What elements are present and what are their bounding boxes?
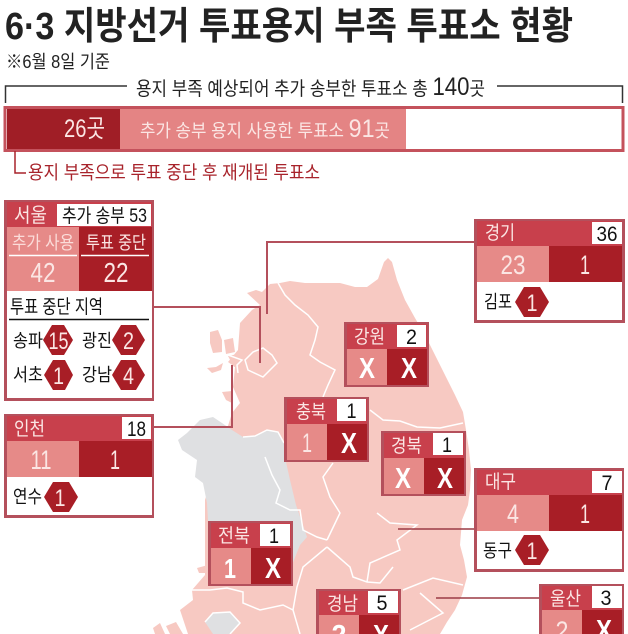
- panel: Daegu: 7: [602, 472, 612, 495]
- panel: Seoul: 4: [123, 363, 134, 390]
- panel: Chungbuk: 충북: [296, 401, 326, 423]
- panel: Jeonbuk: X: [265, 553, 282, 585]
- panel: Incheon: 1: [54, 485, 66, 512]
- panel: Gyeonggi: 1: [580, 250, 590, 280]
- panel: Gyeongbuk: 1: [442, 434, 452, 457]
- panel: Ulsan: 울산: [550, 588, 581, 610]
- panel: Jeonbuk: 1: [224, 553, 236, 584]
- panel: Seoul: 광진: [82, 331, 112, 351]
- panel: Daegu: 대구: [485, 471, 516, 493]
- panel: Gyeonggi: 23: [500, 250, 526, 280]
- leader lines: [154, 242, 539, 598]
- panel: Seoul: 22: [104, 257, 128, 288]
- gray city: Gwangju: [205, 612, 240, 634]
- panel: Daegu: 1: [580, 499, 590, 529]
- panel: Incheon: [4, 414, 154, 518]
- date note: ※6월 8일 기준: [6, 52, 110, 72]
- panel: Seoul: [4, 200, 154, 401]
- panel: Seoul: 송파: [13, 331, 43, 351]
- title: 6·3 지방선거 투표용지 부족 투표소 현황: [5, 6, 573, 48]
- panel: Daegu: 동구: [483, 541, 512, 561]
- panel: Gyeongbuk: 경북: [391, 435, 422, 457]
- panel: Gyeonggi: 1: [526, 290, 538, 317]
- panel: Jeonbuk: 1: [269, 525, 279, 548]
- panel: Seoul: 서울: [14, 204, 47, 227]
- panel: Seoul: 2: [123, 328, 134, 355]
- panel: Daegu: 4: [507, 499, 519, 529]
- panel: Ulsan: [539, 584, 624, 634]
- gray regions without shortages: [178, 417, 307, 570]
- panel: Gangwon: 강원: [354, 326, 385, 348]
- panel: Gyeongnam: 5: [376, 592, 388, 615]
- total bracket: 용지 부족 예상되어 추가 송부한 투표소 총 140곳: [136, 73, 485, 101]
- map of South Korea: [153, 258, 471, 634]
- panel: Seoul: 투표 중단: [86, 233, 146, 253]
- panel: Gyeongbuk: [381, 431, 466, 496]
- stacked bar: 추가 송부 용지 사용한 투표소 91곳: [140, 115, 390, 143]
- panel: Gyeongbuk: X: [437, 463, 454, 495]
- panel: Gyeonggi: [474, 219, 625, 323]
- panel: Incheon: 18: [127, 418, 146, 441]
- panel: Gyeonggi: 김포: [484, 292, 512, 312]
- panel: Gyeongnam: 경남: [327, 593, 358, 615]
- panel: Gangwon: X: [359, 353, 376, 385]
- panel: Gyeonggi: 36: [596, 223, 618, 246]
- panel: Gangwon: [344, 322, 429, 387]
- panel: Chungbuk: X: [341, 428, 358, 460]
- panel: Seoul: 42: [30, 257, 56, 288]
- panel: Seoul: 추가 사용: [12, 233, 74, 253]
- stacked bar: 26곳: [64, 115, 105, 143]
- callout: resumed stations: [15, 151, 320, 183]
- panel: Gangwon: X: [401, 353, 418, 385]
- panel: Daegu: 1: [526, 538, 538, 565]
- panel: Seoul: 투표 중단 지역: [10, 296, 103, 318]
- panel: Chungbuk: 1: [302, 428, 312, 458]
- panel: Chungbuk: 1: [346, 400, 356, 423]
- panel: Incheon: 인천: [14, 418, 45, 440]
- panel: Seoul: 1: [53, 363, 64, 390]
- panel: Jeonbuk: 전북: [218, 525, 250, 547]
- callout: resumed stations: 용지 부족으로 투표 중단 후 재개된 투표소: [28, 162, 320, 183]
- stacked bar: [5, 108, 623, 150]
- panel: Incheon: 11: [30, 445, 52, 475]
- panel: Ulsan: 3: [600, 587, 612, 610]
- panel: Gyeonggi: 경기: [485, 222, 515, 244]
- panel: Incheon: 1: [110, 445, 120, 475]
- panel: Gangwon: 2: [406, 326, 417, 349]
- panel: Jeonbuk: [208, 521, 293, 586]
- total bracket: [6, 73, 622, 103]
- panel: Chungbuk: [284, 397, 369, 462]
- panel: Seoul: 추가 송부 53: [62, 205, 147, 227]
- provincial boundaries: [192, 283, 463, 634]
- panel: Seoul: 강남: [82, 365, 112, 385]
- panel: Seoul: 15: [48, 328, 68, 355]
- panel: Gyeongbuk: X: [395, 463, 412, 495]
- panel: Incheon: 연수: [13, 487, 42, 507]
- panel: Gyeongnam: [316, 589, 401, 634]
- panel: Seoul: 서초: [13, 365, 43, 385]
- panel: Daegu: [474, 468, 624, 572]
